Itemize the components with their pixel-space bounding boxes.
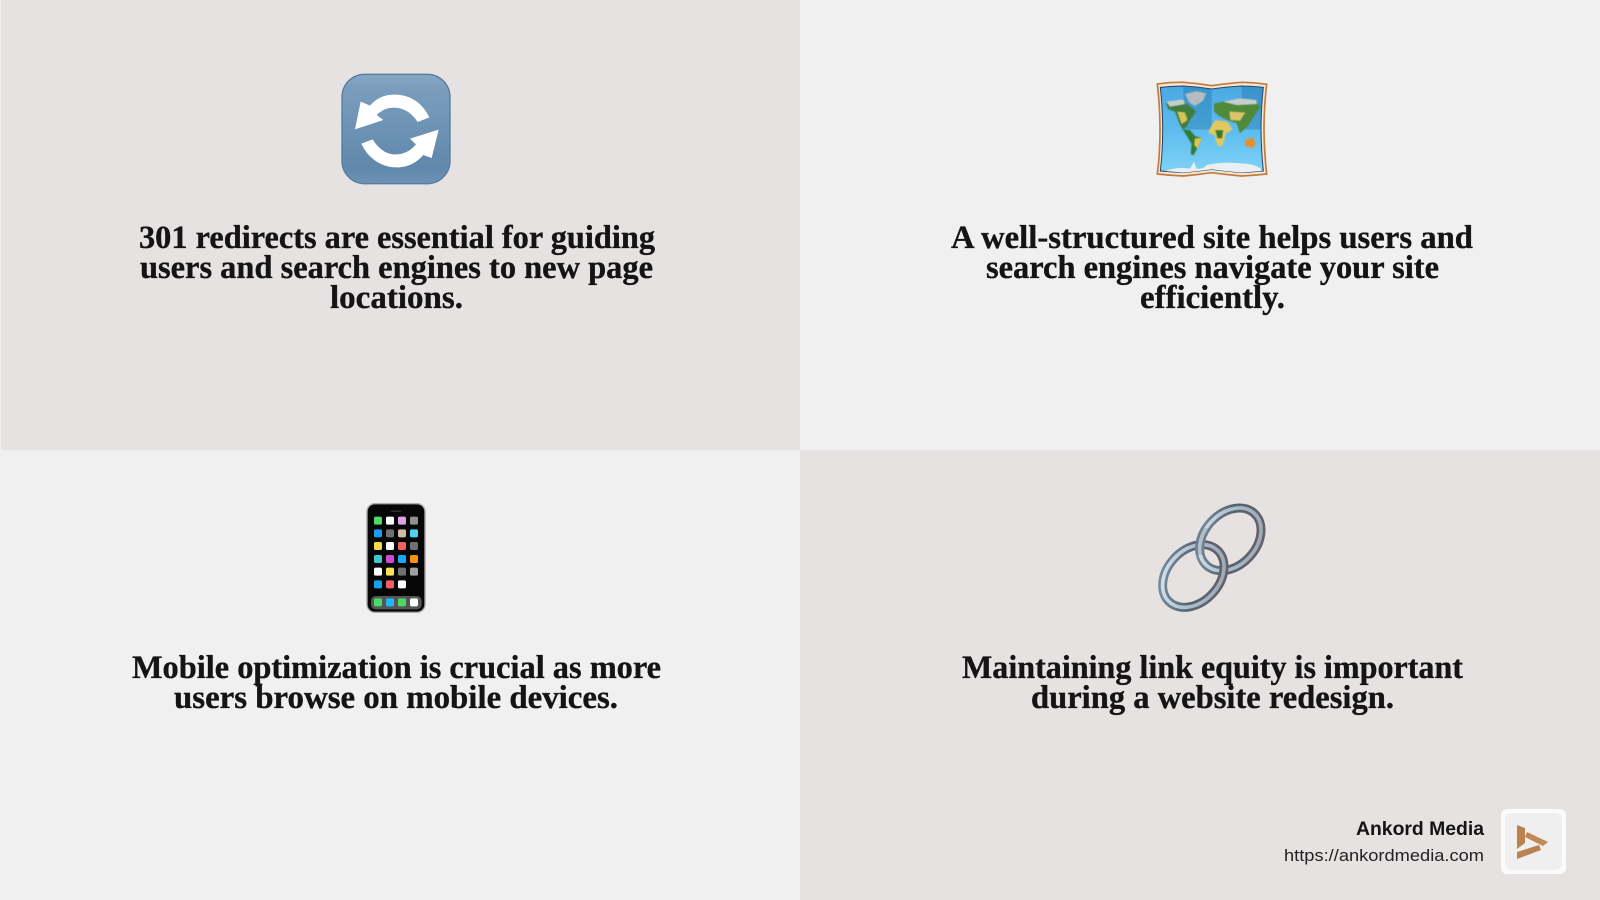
text: site structure statement: efficiently. — [1140, 280, 1285, 316]
text: 301 redirects statement: users and search engines to new page — [140, 250, 653, 286]
map land — [1166, 91, 1261, 155]
panel: mobile optimization — [0, 450, 800, 900]
text: mobile optimization statement: users browse on mobile devices. — [174, 680, 618, 716]
text: link equity statement: Maintaining link equity is important — [962, 650, 1463, 686]
text: mobile optimization statement — [132, 650, 661, 716]
lower link — [1150, 532, 1236, 620]
text: 301 redirects statement: locations. — [330, 280, 463, 316]
icon: smartphone — [367, 504, 425, 612]
app grid — [374, 517, 418, 606]
text: 301 redirects statement: 301 redirects are essential for guiding — [139, 220, 655, 256]
text: site structure statement: search engines navigate your site — [986, 250, 1439, 286]
panel: site structure — [800, 0, 1600, 450]
text: mobile optimization statement: Mobile optimization is crucial as more — [132, 650, 661, 686]
brand name: Ankord Media — [1356, 819, 1484, 840]
panel: link equity — [800, 450, 1600, 900]
upper link — [1187, 496, 1273, 583]
link overlap — [1195, 528, 1212, 555]
text: site structure statement — [951, 220, 1473, 316]
icon: chain links — [1158, 504, 1266, 612]
brand block — [1284, 809, 1566, 874]
text: link equity statement: during a website redesign. — [1031, 680, 1394, 716]
icon: refresh arrows — [342, 74, 450, 184]
panel: 301 redirects — [1, 0, 800, 450]
text: 301 redirects statement — [139, 220, 655, 316]
icon: world map — [1157, 82, 1267, 176]
text: link equity statement — [962, 650, 1463, 716]
logo — [1501, 809, 1566, 874]
brand url: https://ankordmedia.com — [1284, 846, 1484, 865]
text: site structure statement: A well-structured site helps users and — [951, 220, 1473, 256]
